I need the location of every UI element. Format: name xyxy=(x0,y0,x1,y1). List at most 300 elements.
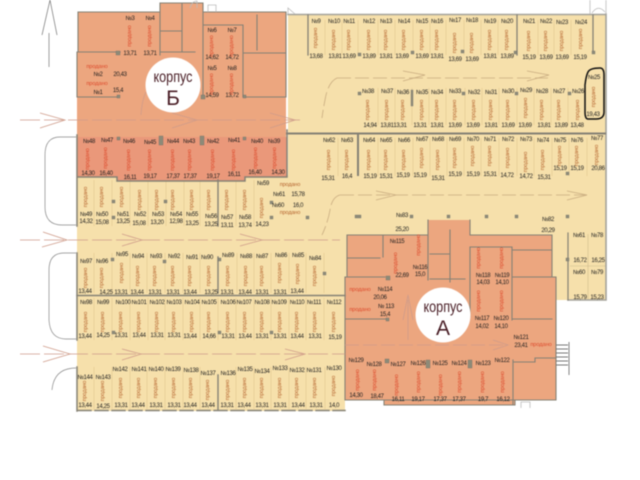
sold labels in cream areas: продано xyxy=(277,263,283,283)
space numbers and areas: №46 xyxy=(123,138,136,145)
space numbers and areas: №6 xyxy=(207,27,218,34)
space numbers and areas: 13,31 xyxy=(273,290,288,296)
space numbers and areas: №68 xyxy=(432,136,445,143)
space numbers and areas: 13,31 xyxy=(114,290,129,296)
space numbers and areas: 15,19 xyxy=(522,55,537,61)
space numbers and areas: 13,25 xyxy=(116,219,131,225)
sold labels in cream areas: продано xyxy=(170,266,176,286)
sold labels in cream areas xyxy=(82,28,600,401)
space numbers and areas: 14,25 xyxy=(96,404,111,410)
space numbers and areas: №8 xyxy=(227,65,238,72)
sold labels in cream areas: продано xyxy=(170,190,176,210)
space numbers and areas: 22,69 xyxy=(395,273,410,279)
space numbers and areas: 14,72 xyxy=(225,55,240,61)
space numbers and areas: 13,89 xyxy=(362,54,377,60)
space numbers and areas: 14,25 xyxy=(99,290,114,296)
sold labels in cream areas: продано xyxy=(83,187,89,207)
space numbers and areas: №40 xyxy=(251,138,264,145)
space numbers and areas: 13,31 xyxy=(255,334,270,340)
space numbers and areas: 13,31 xyxy=(255,290,270,296)
sold labels in cream areas: продано xyxy=(401,150,407,170)
space numbers and areas: №31 xyxy=(485,89,498,96)
space numbers and areas: 13,44 xyxy=(183,403,198,409)
space numbers and areas: 16,40 xyxy=(248,170,263,176)
space numbers and areas: №72 xyxy=(502,136,515,143)
space numbers and areas: №17 xyxy=(449,17,462,24)
sold labels in cream areas: продано xyxy=(365,100,371,120)
sold labels in orange areas: продано xyxy=(480,371,486,393)
space numbers and areas: 13,48 xyxy=(570,123,585,129)
space numbers and areas: №41 xyxy=(228,137,241,144)
space numbers and areas: №21 xyxy=(523,18,536,25)
sold labels in orange areas xyxy=(85,25,552,396)
space numbers and areas: 14,03 xyxy=(476,280,491,286)
space numbers and areas: 15,79 xyxy=(573,295,588,301)
space numbers and areas: №74 xyxy=(537,137,550,144)
space numbers and areas: №121 xyxy=(513,334,530,341)
space numbers and areas: №137 xyxy=(200,370,217,377)
sold labels in cream areas: продано xyxy=(556,100,562,120)
space numbers and areas: 13,69 xyxy=(466,123,481,129)
space numbers and areas xyxy=(77,15,606,410)
space numbers and areas: №99 xyxy=(97,299,110,306)
sold labels in cream areas: продано xyxy=(225,380,231,400)
space numbers and areas: №16 xyxy=(431,18,444,25)
space numbers and areas: 15,08 xyxy=(95,220,110,226)
sold labels in orange areas: продано xyxy=(127,25,133,47)
sold labels in cream areas: продано xyxy=(469,33,475,53)
space numbers and areas: №131 xyxy=(306,367,323,374)
sold labels in cream areas: продано xyxy=(99,187,105,207)
spot dividers xyxy=(94,20,587,409)
space numbers and areas: №27 xyxy=(553,88,566,95)
space numbers and areas: 20,29 xyxy=(541,228,556,234)
space numbers and areas: 14,10 xyxy=(494,324,509,330)
space numbers and areas: №108 xyxy=(254,299,271,306)
space numbers and areas: 13,69 xyxy=(555,55,570,61)
space numbers and areas: 13,69 xyxy=(395,54,410,60)
space numbers and areas: №112 xyxy=(327,299,342,306)
space numbers and areas: №39 xyxy=(268,138,281,145)
space numbers and areas: №140 xyxy=(148,366,165,373)
space numbers and areas: 13,81 xyxy=(537,123,552,129)
sold labels in cream areas: продано xyxy=(119,187,125,207)
sold labels in cream areas: продано xyxy=(504,30,510,50)
space numbers and areas: №114 xyxy=(378,286,393,293)
space numbers and areas: 13,44 xyxy=(183,334,198,340)
space numbers and areas: 15,19 xyxy=(363,174,378,180)
sold labels in cream areas: продано xyxy=(578,29,584,49)
space numbers and areas: №110 xyxy=(290,299,305,306)
sold labels in cream areas: продано xyxy=(294,312,300,332)
space numbers and areas: №36 xyxy=(397,89,410,96)
space numbers and areas: 13,44 xyxy=(237,403,252,409)
space numbers and areas: №91 xyxy=(186,254,199,261)
space numbers and areas: №52 xyxy=(134,211,147,218)
driveway arrows xyxy=(20,71,587,362)
sold labels in cream areas: продано xyxy=(100,312,106,332)
space numbers and areas: 16,72 xyxy=(573,258,588,264)
space numbers and areas: 13,89 xyxy=(554,123,569,129)
sold labels in cream areas: продано xyxy=(575,100,581,120)
sold labels in orange areas: продано xyxy=(499,290,505,312)
space numbers and areas: 15,4 xyxy=(113,88,124,94)
space numbers and areas: 13,31 xyxy=(220,290,235,296)
space numbers and areas: 13,81 xyxy=(430,123,445,129)
space numbers and areas: №60 xyxy=(272,202,285,209)
sold labels in cream areas: продано xyxy=(118,312,124,332)
space numbers and areas: №38 xyxy=(362,88,375,95)
space numbers and areas: №69 xyxy=(449,136,462,143)
sold labels in cream areas: продано xyxy=(505,100,511,120)
sold labels in cream areas: продано xyxy=(242,312,248,332)
sold labels in cream areas: продано xyxy=(435,150,441,170)
space numbers and areas: №71 xyxy=(484,136,497,143)
sold labels in cream areas: продано xyxy=(419,30,425,50)
sold labels in orange areas: продано xyxy=(349,307,371,313)
sold labels in orange areas: продано xyxy=(86,64,108,70)
building A circle label: корпус xyxy=(424,299,462,316)
sold labels in cream areas: продано xyxy=(171,378,177,398)
space numbers and areas: №95 xyxy=(116,251,129,258)
space numbers and areas: №2 xyxy=(93,71,104,78)
space numbers and areas: №60 xyxy=(573,269,586,276)
space numbers and areas: 15,23 xyxy=(590,295,605,301)
space numbers and areas: №53 xyxy=(152,211,165,218)
sold labels in cream areas: продано xyxy=(206,190,212,210)
space numbers and areas: 14,59 xyxy=(205,93,220,99)
space numbers and areas: №142 xyxy=(112,366,129,373)
space numbers and areas: 14,32 xyxy=(79,219,94,225)
sold labels in cream areas: продано xyxy=(294,378,300,398)
sold labels in orange areas: продано xyxy=(476,247,482,269)
space numbers and areas: №1 xyxy=(93,89,104,96)
space numbers and areas: №44 xyxy=(167,138,180,145)
space numbers and areas: №87 xyxy=(256,253,269,260)
space numbers and areas: 14,0 xyxy=(329,403,340,409)
space numbers and areas: №78 xyxy=(591,232,604,239)
sold labels in orange areas: продано xyxy=(187,149,193,171)
space numbers and areas: №134 xyxy=(254,368,271,375)
space numbers and areas: №12 xyxy=(363,18,376,25)
space numbers and areas: 14,94 xyxy=(363,123,378,129)
space numbers and areas: 13,25 xyxy=(185,221,200,227)
sold labels in cream areas: продано xyxy=(312,312,318,332)
space numbers and areas: №86 xyxy=(275,252,288,259)
sold labels in cream areas: продано xyxy=(383,30,389,50)
space numbers and areas: №120 xyxy=(493,315,510,322)
space numbers and areas: №45 xyxy=(144,139,157,146)
space numbers and areas: №34 xyxy=(431,89,444,96)
sold labels in orange areas: продано xyxy=(349,287,371,293)
sold labels in cream areas: продано xyxy=(82,381,88,401)
space numbers and areas: 13,69 xyxy=(518,123,533,129)
sold labels in cream areas: продано xyxy=(205,380,211,400)
space numbers and areas: 15,19 xyxy=(466,172,481,178)
space numbers and areas: 20,06 xyxy=(373,295,388,301)
space numbers and areas: 13,44 xyxy=(290,334,305,340)
sold labels in cream areas: продано xyxy=(99,268,105,288)
space numbers and areas: №133 xyxy=(272,365,289,372)
space numbers and areas: 13,44 xyxy=(290,289,305,295)
space numbers and areas: №37 xyxy=(381,88,394,95)
sold labels in cream areas: продано xyxy=(366,150,372,170)
space numbers and areas: №48 xyxy=(83,138,96,145)
space numbers and areas: 13,11 xyxy=(221,223,234,229)
sold labels in cream areas: продано xyxy=(452,100,458,120)
sold labels in cream areas: продано xyxy=(591,87,597,107)
space numbers and areas: 17,37 xyxy=(166,174,181,180)
space numbers and areas: 19,43 xyxy=(586,112,601,118)
space numbers and areas: 13,72 xyxy=(225,93,240,99)
space numbers and areas: 15,31 xyxy=(379,174,394,180)
sold labels in cream areas: продано xyxy=(243,266,249,286)
sold labels in cream areas: продано xyxy=(119,263,125,283)
space numbers and areas: №115 xyxy=(390,238,405,245)
space numbers and areas: 13,68 xyxy=(309,54,324,60)
sold labels in cream areas: продано xyxy=(434,30,440,50)
space numbers and areas: 19,7 xyxy=(478,397,489,403)
space numbers and areas: 13,31 xyxy=(221,334,236,340)
space numbers and areas: №56 xyxy=(205,213,218,220)
sold labels in cream areas: продано xyxy=(313,28,319,48)
space numbers and areas: 14,10 xyxy=(495,280,510,286)
space numbers and areas: 16,25 xyxy=(591,258,606,264)
space numbers and areas: №109 xyxy=(271,299,288,306)
space numbers and areas: 14,72 xyxy=(519,174,534,180)
space numbers and areas: №128 xyxy=(366,361,383,368)
space numbers and areas: 13,31 xyxy=(114,333,129,339)
space numbers and areas: 15,0 xyxy=(415,272,426,278)
space numbers and areas: №4 xyxy=(145,15,156,22)
sold labels in cream areas: продано xyxy=(366,30,372,50)
space numbers and areas: 17,37 xyxy=(452,397,467,403)
sold labels in cream areas: продано xyxy=(259,378,265,398)
space numbers and areas: 12,98 xyxy=(169,219,184,225)
sold labels in cream areas: продано xyxy=(400,100,406,120)
space numbers and areas: №103 xyxy=(166,299,183,306)
sold labels in orange areas: продано xyxy=(86,81,108,87)
sold labels in cream areas: продано xyxy=(189,312,195,332)
sold labels in cream areas: продано xyxy=(401,30,407,50)
space numbers and areas: №118 xyxy=(476,272,491,279)
space numbers and areas: 13,44 xyxy=(238,334,253,340)
sold labels in cream areas: продано xyxy=(434,100,440,120)
sold labels in orange areas: продано xyxy=(355,369,361,391)
space numbers and areas: №77 xyxy=(591,135,604,142)
space numbers and areas: 14,72 xyxy=(500,173,515,179)
space numbers and areas: 13,31 xyxy=(167,403,182,409)
space numbers and areas: №111 xyxy=(307,299,322,306)
space numbers and areas: №88 xyxy=(240,253,253,260)
space numbers and areas: №119 xyxy=(495,272,510,279)
space numbers and areas: №107 xyxy=(236,299,253,306)
space numbers and areas: №24 xyxy=(575,19,588,26)
sold labels in cream areas: продано xyxy=(594,145,600,165)
walls xyxy=(77,3,606,411)
space numbers and areas: №125 xyxy=(432,360,449,367)
space numbers and areas: 14,62 xyxy=(205,55,220,61)
sold labels in cream areas: продано xyxy=(487,30,493,50)
space numbers and areas: №97 xyxy=(80,258,93,265)
space numbers and areas: №3 xyxy=(125,15,136,22)
space numbers and areas: №132 xyxy=(289,367,306,374)
stairs xyxy=(556,342,569,375)
space numbers and areas: 14,30 xyxy=(349,393,364,399)
space numbers and areas: №15 xyxy=(416,18,429,25)
space numbers and areas: №89 xyxy=(222,252,235,259)
space numbers and areas: №102 xyxy=(149,299,166,306)
sold labels in orange areas: продано xyxy=(372,369,378,391)
sold labels in cream areas: продано xyxy=(539,100,545,120)
sold labels in orange areas: продано xyxy=(147,149,153,171)
space numbers and areas: №105 xyxy=(201,299,218,306)
space numbers and areas: №30 xyxy=(502,88,515,95)
building A circle label: А xyxy=(436,317,450,340)
space numbers and areas: 13,44 xyxy=(291,403,306,409)
space numbers and areas: 15,31 xyxy=(537,175,552,181)
space numbers and areas: 17,37 xyxy=(183,174,198,180)
sold labels in cream areas: продано xyxy=(171,312,177,332)
space numbers and areas: №9 xyxy=(311,18,322,25)
space numbers and areas: 19,17 xyxy=(411,397,426,403)
space numbers and areas: №67 xyxy=(416,136,429,143)
sold labels in cream areas: продано xyxy=(206,312,212,332)
sold labels in cream areas: продано xyxy=(452,148,458,168)
space numbers and areas: №135 xyxy=(237,366,254,373)
sold labels in cream areas: продано xyxy=(136,312,142,332)
building A block xyxy=(345,220,556,405)
space numbers and areas: №117 xyxy=(475,315,490,322)
space numbers and areas: 15,4 xyxy=(380,312,391,318)
building B circle label: Б xyxy=(166,87,180,110)
sold labels in cream areas: продано xyxy=(83,268,89,288)
space numbers and areas: №64 xyxy=(363,137,376,144)
space numbers and areas: №94 xyxy=(132,253,145,260)
sold labels in orange areas: продано xyxy=(126,149,132,171)
space numbers and areas: №139 xyxy=(165,366,182,373)
space numbers and areas: 13,20 xyxy=(150,220,165,226)
space numbers and areas: №130 xyxy=(326,365,343,372)
sold labels in cream areas: продано xyxy=(153,378,159,398)
space numbers and areas: №124 xyxy=(451,360,468,367)
space numbers and areas: 13,31 xyxy=(166,290,181,296)
space numbers and areas: №32 xyxy=(468,89,481,96)
space numbers and areas: 13,69 xyxy=(415,54,430,60)
space numbers and areas: 13,31 xyxy=(167,333,182,339)
sold labels in orange areas: продано xyxy=(530,342,552,348)
north arrow xyxy=(42,0,57,67)
sold labels in cream areas: продано xyxy=(259,312,265,332)
sold labels in cream areas: продано xyxy=(574,146,580,166)
space numbers and areas: 13,69 xyxy=(465,57,480,63)
sold labels in cream areas: продано xyxy=(523,152,529,172)
space numbers and areas: №61 xyxy=(573,232,586,239)
space numbers and areas: №28 xyxy=(536,88,549,95)
sold labels in cream areas: продано xyxy=(470,146,476,166)
sold labels in orange areas: продано xyxy=(272,147,278,169)
space numbers and areas: 13,44 xyxy=(183,290,198,296)
space numbers and areas: №18 xyxy=(466,17,479,24)
space numbers and areas: 19,17 xyxy=(206,174,221,180)
space numbers and areas: 18,47 xyxy=(370,394,385,400)
sold labels in orange areas: продано xyxy=(416,371,422,393)
space numbers and areas: 20,86 xyxy=(591,166,606,172)
sold labels in cream areas: продано xyxy=(225,312,231,332)
space numbers and areas: 16,40 xyxy=(99,171,114,177)
sold labels in cream areas: продано xyxy=(259,266,265,286)
space numbers and areas: №51 xyxy=(117,211,130,218)
space numbers and areas: 20,43 xyxy=(113,72,128,78)
sold labels in cream areas: продано xyxy=(331,376,337,396)
space numbers and areas: №73 xyxy=(520,136,533,143)
sold labels in orange areas: продано xyxy=(231,149,237,171)
space numbers and areas: №96 xyxy=(96,258,109,265)
space numbers and areas: №75 xyxy=(554,137,567,144)
space numbers and areas: 13,44 xyxy=(132,333,147,339)
space numbers and areas: №25 xyxy=(588,74,601,81)
space numbers and areas: №33 xyxy=(449,88,462,95)
sold labels in cream areas: продано xyxy=(312,266,318,286)
sold labels in orange areas: продано xyxy=(500,371,506,393)
space numbers and areas: 13,69 xyxy=(501,123,516,129)
space numbers and areas: №126 xyxy=(410,360,427,367)
sold labels in cream areas: продано xyxy=(83,312,89,332)
space numbers and areas: №122 xyxy=(494,357,511,364)
space numbers and areas: 13,81 xyxy=(380,123,395,129)
building A circle label xyxy=(416,288,470,342)
space numbers and areas: №20 xyxy=(501,18,514,25)
space numbers and areas: №93 xyxy=(150,253,163,260)
space numbers and areas: 15,19 xyxy=(413,173,428,179)
space numbers and areas: №50 xyxy=(96,211,109,218)
space numbers and areas: 13,31 xyxy=(273,403,288,409)
space numbers and areas: 23,41 xyxy=(514,343,529,349)
sold labels in cream areas: продано xyxy=(187,266,193,286)
space numbers and areas: 13,44 xyxy=(78,289,93,295)
space numbers and areas: 13,81 xyxy=(379,54,394,60)
sold labels in cream areas: продано xyxy=(452,33,458,53)
space numbers and areas: 13,31 xyxy=(150,333,165,339)
sold labels in cream areas: продано xyxy=(189,190,195,210)
space numbers and areas: 13,31 xyxy=(255,403,270,409)
space numbers and areas: №59 xyxy=(257,180,270,187)
space numbers and areas: №13 xyxy=(380,18,393,25)
space numbers and areas: 15,19 xyxy=(570,166,585,172)
space numbers and areas: 16,11 xyxy=(392,397,405,403)
space numbers and areas: 14,66 xyxy=(202,334,217,340)
space numbers and areas: №129 xyxy=(348,357,365,364)
building B block xyxy=(77,3,286,137)
space numbers and areas: №144 xyxy=(77,374,94,381)
sold labels in orange areas: продано xyxy=(394,374,400,396)
space numbers and areas: №62 xyxy=(323,137,336,144)
sold labels in cream areas: продано xyxy=(543,31,549,51)
space numbers and areas: 16,0 xyxy=(293,203,304,209)
sold labels in cream areas: продано xyxy=(344,150,350,170)
sold labels in orange areas: продано xyxy=(209,73,215,95)
space numbers and areas: №98 xyxy=(80,299,93,306)
space numbers and areas: №136 xyxy=(220,370,237,377)
sold labels in cream areas: продано xyxy=(154,190,160,210)
space numbers and areas: 13,71 xyxy=(143,51,158,57)
sold labels in cream areas: продано xyxy=(224,190,230,210)
space numbers and areas: №90 xyxy=(201,254,214,261)
space numbers and areas: 13,31 xyxy=(149,403,164,409)
space numbers and areas: №54 xyxy=(170,211,183,218)
sold labels in cream areas: продано xyxy=(277,312,283,332)
sold labels in cream areas: продано xyxy=(540,150,546,170)
